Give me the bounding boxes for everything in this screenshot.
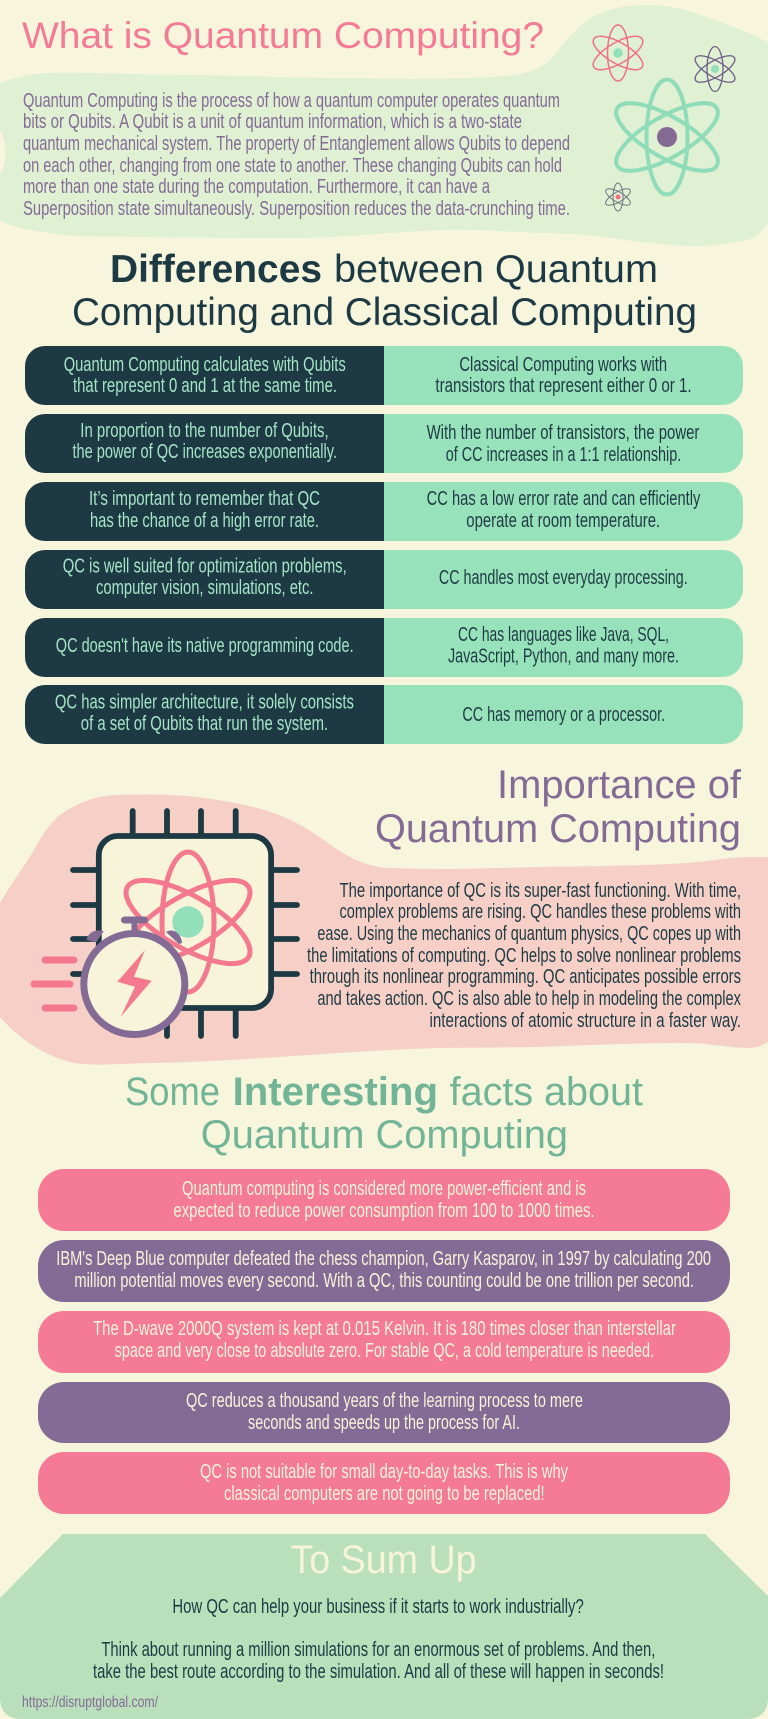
intro paragraph: more than one state during the computation. Furthermore, it can have a bbox=[23, 175, 490, 198]
fact 3 bbox=[38, 1311, 730, 1373]
heading: importance: Importance of bbox=[497, 763, 742, 807]
row 4 bbox=[25, 550, 743, 609]
summary text: How QC can help your business if it starts to work industrially? bbox=[172, 1595, 584, 1618]
icon: pink atom bbox=[589, 25, 647, 81]
chip pins bbox=[73, 811, 297, 1036]
row 1 bbox=[25, 346, 743, 405]
chip body bbox=[99, 836, 271, 1008]
comparison table bbox=[25, 346, 743, 744]
row 3: operate at room temperature. bbox=[466, 509, 660, 532]
intro paragraph: bits or Qubits. A Qubit is a unit of quantum information, which is a two-state bbox=[23, 110, 522, 133]
heading: differences: Differences bbox=[110, 248, 322, 291]
row 6: of a set of Qubits that run the system. bbox=[81, 712, 328, 735]
green background shape bbox=[0, 1534, 768, 1719]
row 4: QC is well suited for optimization problems, bbox=[63, 554, 347, 578]
heading: interesting facts: Some bbox=[125, 1070, 220, 1114]
row 2 bbox=[25, 414, 743, 473]
green background blob bbox=[0, 5, 768, 246]
intro paragraph: Superposition state simultaneously. Superposition reduces the data-crunching time. bbox=[23, 197, 570, 220]
heading: interesting facts: Quantum Computing bbox=[201, 1113, 568, 1157]
row 2: the power of QC increases exponentially. bbox=[72, 440, 337, 463]
fact 1: expected to reduce power consumption from 100 to 1000 times. bbox=[173, 1199, 595, 1222]
intro paragraph bbox=[23, 89, 570, 220]
icon: small atom bbox=[603, 183, 633, 211]
row 6: QC has simpler architecture, it solely consists bbox=[55, 690, 354, 714]
row 4: computer vision, simulations, etc. bbox=[96, 576, 314, 599]
row 5 bbox=[25, 618, 743, 677]
fact 5: QC is not suitable for small day-to-day tasks. This is why bbox=[200, 1460, 569, 1483]
row 3 bbox=[25, 482, 743, 541]
fact 4: seconds and speeds up the process for AI. bbox=[248, 1411, 520, 1434]
intro paragraph: on each other, changing from one state to another. These changing Qubits can hold bbox=[23, 154, 562, 177]
heading: importance bbox=[375, 763, 742, 851]
row 1: Classical Computing works with bbox=[459, 353, 667, 376]
intro paragraph: Quantum Computing is the process of how a quantum computer operates quantum bbox=[23, 89, 560, 112]
heading: differences bbox=[72, 248, 697, 334]
fact 2 bbox=[38, 1240, 730, 1302]
icon: purple atom bbox=[692, 46, 738, 92]
row 1: Quantum Computing calculates with Qubits bbox=[64, 353, 346, 376]
atom in chip bbox=[114, 852, 262, 992]
icon: large green atom bbox=[607, 80, 727, 194]
facts list bbox=[38, 1169, 730, 1514]
heading: interesting facts: facts about bbox=[450, 1070, 643, 1114]
title: What is Quantum Computing? bbox=[22, 15, 544, 56]
row 5: QC doesn't have its native programming code. bbox=[56, 634, 354, 657]
row 3: It’s important to remember that QC bbox=[89, 487, 320, 510]
fact 1: Quantum computing is considered more power-efficient and is bbox=[182, 1177, 586, 1200]
panel: to sum up bbox=[0, 1534, 768, 1719]
heading: importance: Quantum Computing bbox=[375, 807, 741, 851]
icon: quantum chip with stopwatch bbox=[34, 811, 297, 1036]
importance paragraph bbox=[307, 879, 742, 1032]
fact 1 bbox=[38, 1169, 730, 1231]
panel: importance of quantum computing bbox=[0, 763, 768, 1065]
heading: interesting facts bbox=[125, 1070, 643, 1157]
row 6: CC has memory or a processor. bbox=[462, 703, 665, 726]
pink background blob bbox=[0, 794, 768, 1065]
row 1: that represent 0 and 1 at the same time. bbox=[73, 374, 337, 397]
fact 5: classical computers are not going to be replaced! bbox=[224, 1482, 545, 1505]
stopwatch bbox=[84, 916, 185, 1034]
row 6 bbox=[25, 685, 743, 744]
heading: to sum up: To Sum Up bbox=[290, 1538, 477, 1582]
source url: https://disruptglobal.com/ bbox=[22, 1694, 158, 1711]
heading: interesting facts: Interesting bbox=[233, 1070, 438, 1114]
speed lines bbox=[34, 960, 74, 1008]
row 2: In proportion to the number of Qubits, bbox=[80, 419, 329, 442]
summary text bbox=[93, 1595, 664, 1683]
heading: differences: Computing and Classical Computing bbox=[72, 291, 697, 334]
fact 4 bbox=[38, 1382, 730, 1443]
panel: what is quantum computing bbox=[0, 5, 768, 246]
row 5: CC has languages like Java, SQL, bbox=[458, 623, 669, 646]
fact 4: QC reduces a thousand years of the learning process to mere bbox=[186, 1389, 583, 1412]
fact 5 bbox=[38, 1452, 730, 1514]
heading: differences: between Quantum bbox=[334, 248, 658, 291]
row 3: has the chance of a high error rate. bbox=[90, 509, 319, 532]
intro paragraph: quantum mechanical system. The property of Entanglement allows Qubits to depend bbox=[23, 132, 570, 155]
